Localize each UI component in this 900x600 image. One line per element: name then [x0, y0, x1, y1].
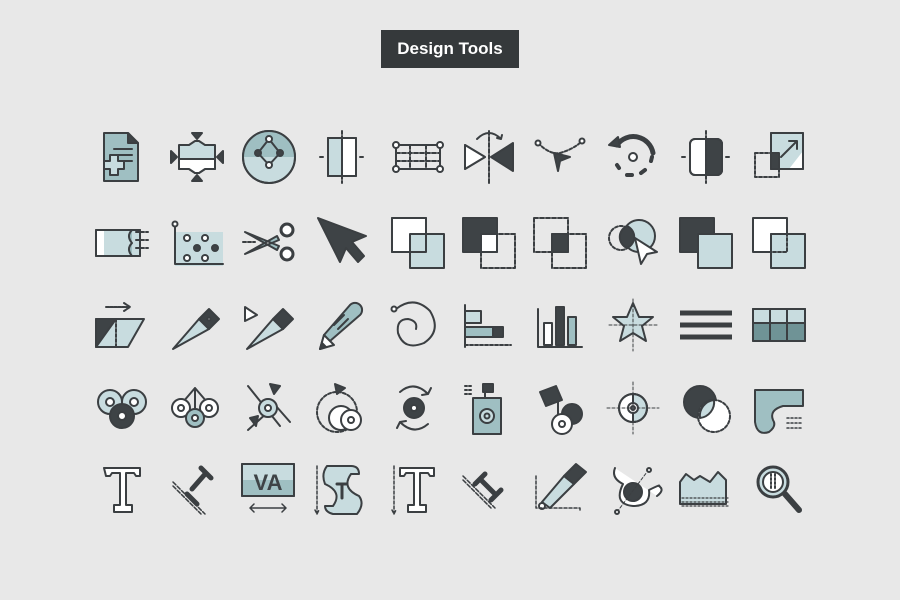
icon: bezier pen — [536, 138, 584, 171]
icon: spiral — [392, 302, 435, 345]
icon: scissors — [243, 224, 293, 260]
icon: double squares — [753, 218, 805, 268]
icon: split rect — [320, 131, 364, 183]
icon: brush — [536, 464, 586, 512]
icon: type path — [173, 468, 211, 514]
icon: disc orbit — [317, 384, 361, 432]
icon: curl shape — [755, 390, 803, 433]
icon: scroll type — [315, 466, 362, 514]
icon: dot grid — [172, 222, 223, 266]
icon: dashed box — [393, 142, 443, 172]
icon: rotate — [609, 137, 653, 175]
icon: vertical T — [392, 466, 434, 514]
icon: knife select — [245, 307, 293, 349]
icon: knife — [173, 309, 219, 349]
icon: grid — [753, 309, 805, 341]
title — [381, 30, 519, 68]
icon: three discs — [98, 390, 146, 428]
icon: intersect dark — [463, 218, 515, 268]
icon: pencil — [320, 303, 362, 349]
icon: anchor circle — [243, 131, 295, 183]
icon: intersect dashed — [534, 218, 586, 268]
icon: target disc — [607, 382, 659, 434]
icon: venn — [684, 386, 730, 432]
icon: waveform — [680, 472, 730, 506]
icon: v-bars — [538, 307, 582, 347]
icon: kerning VA — [242, 464, 294, 512]
icon: front square — [680, 218, 732, 268]
icon: curl dot — [614, 468, 662, 514]
icon: disc rotate — [397, 386, 431, 430]
icon: overlap squares — [392, 218, 444, 268]
icon: cursor — [318, 218, 366, 262]
icon: new document — [104, 133, 138, 181]
icon: skew — [96, 303, 144, 347]
title: Design Tools — [397, 39, 503, 58]
icon: pour discs — [540, 386, 582, 434]
icon: flip — [465, 131, 513, 183]
icon: type path 2 — [463, 474, 501, 508]
icon: half fill — [682, 131, 730, 183]
icon: scale — [755, 133, 803, 177]
icon: star — [609, 299, 657, 351]
icon: magnifier — [758, 467, 799, 510]
icon: type T — [104, 468, 140, 512]
icon: kerning VA: VA — [254, 470, 283, 495]
icon: lines — [680, 313, 732, 337]
icon: circles cursor — [609, 220, 657, 264]
icon: disc tree — [172, 388, 218, 427]
icon: spray — [465, 384, 501, 434]
icon: expand — [171, 133, 223, 181]
icon: disc arrows — [248, 384, 290, 430]
icon: h-bars — [465, 305, 511, 347]
icon: page curl — [96, 230, 148, 256]
